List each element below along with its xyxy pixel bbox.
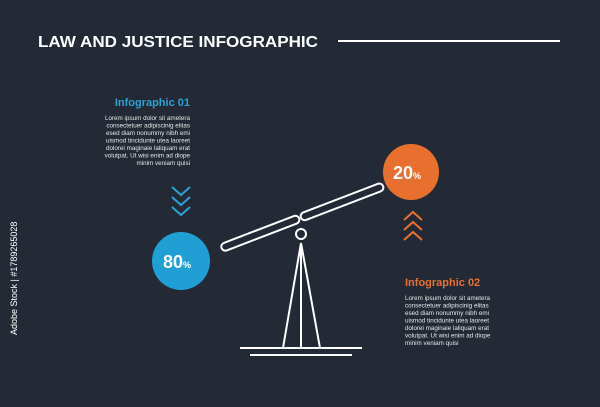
text block: infographic 02: minim veniam quisi <box>405 340 459 347</box>
text block: infographic 01: esed diam nonummy nibh emi <box>106 130 190 137</box>
icon: blue down chevrons <box>172 187 190 215</box>
text block: infographic 01: volutpat. Ut wisi enim ad diope <box>105 152 190 160</box>
text block: infographic 01: uismod tincidunte utea laoreet <box>106 138 190 144</box>
text block: infographic 02: Infographic 02 <box>405 277 480 289</box>
circle: 80% <box>152 232 210 290</box>
text block: infographic 01: Infographic 01 <box>115 97 190 109</box>
text block: infographic 01 <box>105 97 190 167</box>
title: LAW AND JUSTICE INFOGRAPHIC <box>38 34 318 51</box>
text block: infographic 01: Lorem ipsum dolor sit ametera <box>105 115 190 122</box>
text block: infographic 02: esed diam nonummy nibh emi <box>405 310 489 317</box>
circle: 20% <box>383 144 439 200</box>
circle: 20%: 20% <box>393 163 421 183</box>
side id: Adobe Stock | #1789265028 <box>9 222 19 335</box>
text block: infographic 01: dolorei maginaie laliquam erat <box>106 145 190 152</box>
text block: infographic 02: dolorei maginaie laliquam erat <box>405 325 489 332</box>
text block: infographic 01: consectetuer adipiscinig elitas <box>106 122 190 130</box>
text block: infographic 02 <box>405 277 491 347</box>
text block: infographic 02: uismod tincidunte utea laoreet <box>405 318 489 324</box>
text block: infographic 02: consectetuer adipiscinig elitas <box>405 302 489 310</box>
icon: orange up chevrons <box>404 212 422 240</box>
circle: 80%: 80% <box>163 252 191 272</box>
seesaw illustration <box>220 182 385 355</box>
text block: infographic 02: volutpat. Ut wisi enim ad diope <box>405 332 491 340</box>
text block: infographic 02: Lorem ipsum dolor sit ametera <box>405 295 491 302</box>
text block: infographic 01: minim veniam quisi <box>136 160 190 167</box>
